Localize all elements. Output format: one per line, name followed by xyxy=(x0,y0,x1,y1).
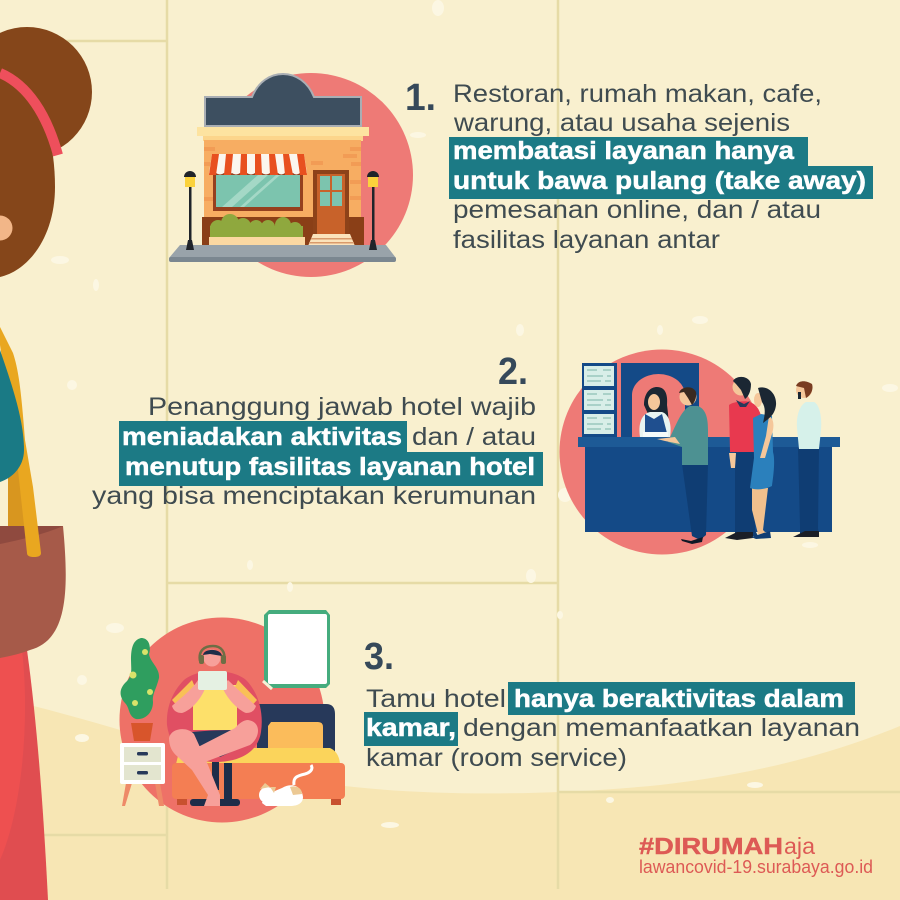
step 3 text block: Tamu hotel xyxy=(366,685,506,713)
bag inner shade xyxy=(0,526,63,544)
bed cushion xyxy=(268,722,323,748)
hair band xyxy=(0,73,58,155)
steps xyxy=(308,234,355,246)
step 1 text block: Restoran, rumah makan, cafe, xyxy=(453,80,822,108)
guest: man in teal xyxy=(657,387,708,544)
bag body xyxy=(0,526,66,658)
bush xyxy=(210,214,303,237)
character: woman with bag, cropped on left edge xyxy=(0,27,92,900)
step 2 text block: dan / atau xyxy=(412,423,536,451)
guest: man on phone xyxy=(793,381,821,537)
sofa bed base xyxy=(172,763,345,799)
door xyxy=(313,170,349,235)
step 1 text block: pemesanan online, dan / atau xyxy=(453,196,821,224)
person xyxy=(169,646,258,806)
step 2 text block: yang bisa menciptakan kerumunan xyxy=(92,482,536,510)
pink circle xyxy=(209,73,413,277)
footer hashtag and website: #DIRUMAH xyxy=(639,833,783,859)
guest: man in red xyxy=(725,377,762,540)
red dress xyxy=(0,650,48,900)
street lamp left xyxy=(184,171,196,250)
illustration: restaurant storefront xyxy=(169,73,413,277)
head hair xyxy=(0,67,55,277)
chair stand xyxy=(212,762,232,799)
pink circle xyxy=(120,618,324,822)
step 2 text block: meniadakan aktivitas xyxy=(122,423,402,451)
illustration: hotel reception desk xyxy=(560,350,840,554)
counter xyxy=(585,447,832,532)
back bag strap xyxy=(8,465,26,530)
step 3 text block: kamar, xyxy=(366,714,456,742)
step 2 text block xyxy=(92,393,543,510)
ear xyxy=(0,216,12,240)
guest: woman in blue dress xyxy=(750,387,776,539)
step 1 text block: untuk bawa pulang (take away) xyxy=(453,167,866,195)
cornice xyxy=(197,127,369,136)
footer hashtag and website: aja xyxy=(784,833,815,859)
striped awning xyxy=(209,154,307,175)
potted plant xyxy=(121,638,159,741)
planter xyxy=(209,237,305,246)
teal shirt xyxy=(0,350,24,482)
step 1 number: 1. xyxy=(405,77,436,119)
step 3 text block: kamar (room service) xyxy=(366,744,627,772)
step 2 number: 2. xyxy=(498,351,528,393)
receptionist xyxy=(639,387,671,437)
pavement xyxy=(169,245,396,262)
round chair xyxy=(167,671,262,762)
wall picture frame xyxy=(263,610,330,689)
bedside drawer xyxy=(120,743,165,806)
hair bun xyxy=(0,27,92,157)
illustration: guest relaxing in hotel room xyxy=(120,610,345,822)
window xyxy=(213,172,303,211)
step 1 text block: fasilitas layanan antar xyxy=(453,226,720,254)
street lamp right xyxy=(367,171,379,250)
shop sign xyxy=(205,74,361,126)
step 1 text block: warung, atau usaha sejenis xyxy=(453,109,790,137)
pink circle xyxy=(560,350,764,554)
footer hashtag and website xyxy=(639,833,873,877)
wainscot xyxy=(202,217,364,246)
step 1 text block xyxy=(449,80,873,254)
key shelf xyxy=(582,363,617,437)
dress lighter fold xyxy=(0,650,25,860)
brick wall xyxy=(204,140,361,218)
cat xyxy=(259,765,312,806)
front bag strap xyxy=(0,327,41,557)
bed headboard xyxy=(257,704,335,752)
mattress xyxy=(176,748,340,764)
booth with arch xyxy=(621,363,699,437)
step 2 text block: Penanggung jawab hotel wajib xyxy=(148,393,536,421)
step 3 text block: hanya beraktivitas dalam xyxy=(514,685,844,713)
step 3 text block xyxy=(364,682,860,772)
step 3 text block: dengan memanfaatkan layanan xyxy=(463,714,860,742)
step 1 text block: membatasi layanan hanya xyxy=(453,137,795,165)
step 2 text block: menutup fasilitas layanan hotel xyxy=(125,453,535,481)
step 3 number: 3. xyxy=(364,636,394,678)
footer hashtag and website: lawancovid-19.surabaya.go.id xyxy=(639,857,873,877)
